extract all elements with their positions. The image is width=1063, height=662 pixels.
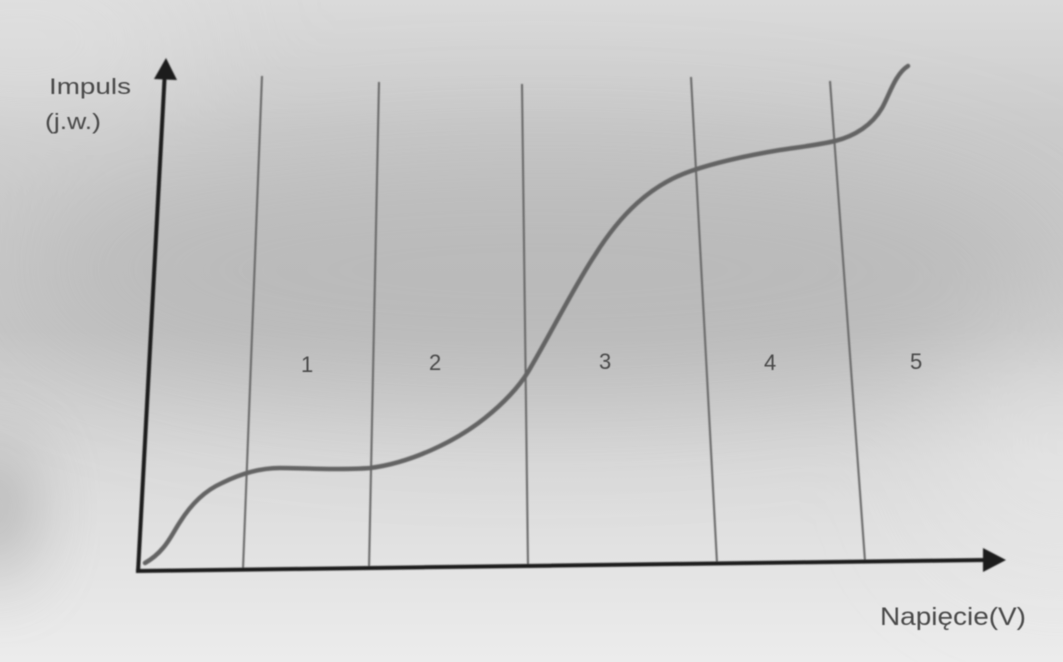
y axis arrow: [138, 58, 177, 572]
zone 3 label: 3: [599, 349, 611, 374]
zone 2 label: 2: [429, 350, 441, 375]
x axis label: Napięcie(V): [880, 603, 1026, 631]
zone 1 label: 1: [301, 352, 313, 377]
vertical zone dividers: [243, 76, 865, 569]
y axis unit: (j.w.): [45, 109, 101, 134]
impulse curve: [145, 66, 908, 563]
zone 5 label: 5: [910, 349, 922, 374]
y axis label: Impuls: [49, 74, 131, 99]
zone 4 label: 4: [764, 350, 776, 375]
x axis arrow: [136, 548, 1006, 572]
